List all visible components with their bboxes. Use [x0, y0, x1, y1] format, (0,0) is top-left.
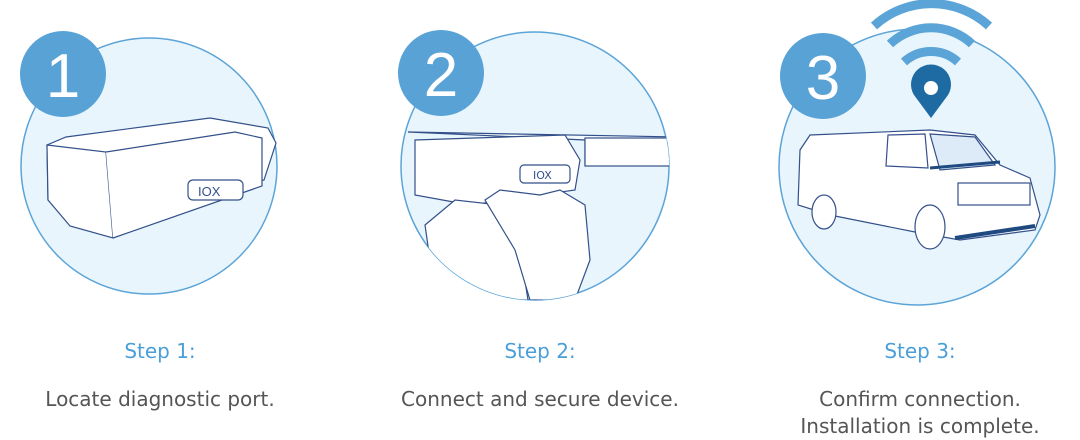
step 3 description — [800, 387, 1040, 438]
step 2 label: Step 2: — [504, 339, 576, 363]
icon: location pin — [911, 64, 951, 118]
illustrations — [20, 0, 1056, 306]
icon: van — [798, 130, 1040, 249]
step 3 description: Confirm connection. — [819, 387, 1021, 411]
panel: step 2 circle — [401, 32, 680, 300]
step 3 description: Installation is complete. — [800, 414, 1040, 438]
icon: device and hands: IOX — [533, 169, 552, 182]
panel: step 3 circle — [779, 4, 1055, 305]
step 2 description: Connect and secure device. — [401, 387, 679, 411]
panel: step 1 circle — [21, 38, 277, 294]
icon: IOX device: IOX — [198, 184, 221, 199]
icon: IOX device — [47, 118, 276, 238]
step 1 description: Locate diagnostic port. — [45, 387, 275, 411]
step 3 label: Step 3: — [884, 339, 956, 363]
badge: 3: 3 — [806, 44, 840, 113]
badge: 1: 1 — [46, 42, 80, 111]
step 1 label: Step 1: — [124, 339, 196, 363]
icon: device and hands — [408, 132, 680, 300]
badge: 2 — [398, 30, 484, 116]
icon: wifi waves — [874, 4, 989, 62]
badge: 3 — [780, 33, 866, 119]
badge: 2: 2 — [424, 41, 458, 110]
badge: 1 — [20, 31, 106, 117]
